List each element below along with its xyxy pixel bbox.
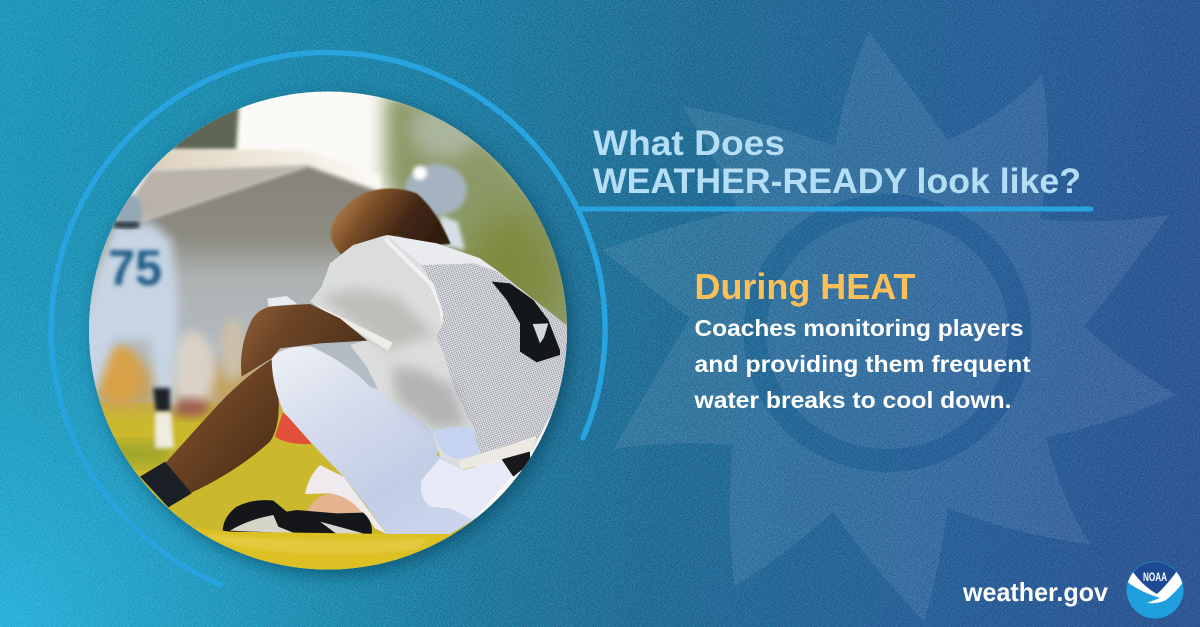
blue arc around photo: [51, 53, 605, 585]
upper figure traced group: [241, 188, 568, 470]
hair: [331, 188, 451, 255]
far leg skin: [165, 359, 279, 493]
bare knee: [306, 493, 363, 515]
heading: WEATHER-READY look like?: [593, 162, 1081, 201]
white knee padding: [305, 465, 387, 534]
website address: weather.gov: [962, 577, 1109, 607]
white football pants: [272, 346, 515, 534]
black sock: [140, 462, 192, 507]
photo backdrop: sky, tree line and field: [80, 85, 590, 580]
cleat: [223, 500, 372, 535]
heading: What Does: [593, 124, 785, 163]
photo shadow: [93, 96, 573, 576]
subheading: During HEAT: During HEAT: [694, 266, 916, 307]
black jersey number: [492, 282, 560, 362]
body text: and providing them frequent: [694, 351, 1031, 377]
body text: [693, 315, 1031, 413]
short sleeve: [310, 237, 443, 351]
sun emblem watermark: [602, 31, 1177, 622]
body text: Coaches monitoring players: [694, 315, 1024, 341]
padded hip panel: [421, 458, 515, 520]
blurred background player number 75: [75, 194, 178, 448]
lower figure traced group: [140, 346, 530, 577]
heading divider line: [578, 206, 1091, 212]
red water bottle: [275, 413, 312, 444]
body text: water breaks to cool down.: [693, 387, 1012, 413]
NOAA logo: [1126, 562, 1184, 618]
blurred house: [80, 150, 380, 425]
photo: football player resting on grass: [89, 92, 567, 570]
foreground grass: [192, 528, 452, 570]
blurred helmet and shoulder of background player: [405, 164, 467, 250]
plastic packet in hand: [267, 296, 297, 307]
NOAA logo: NOAA: [1143, 572, 1167, 584]
blurred crowd and field edge: [75, 318, 475, 582]
white mesh jersey: [310, 235, 568, 470]
dark shadow under jersey: [502, 450, 530, 477]
jersey number highlight: [533, 323, 548, 343]
heading: [593, 124, 1081, 201]
blurred background player number 75: 75: [108, 240, 162, 296]
forearm: [241, 304, 367, 377]
